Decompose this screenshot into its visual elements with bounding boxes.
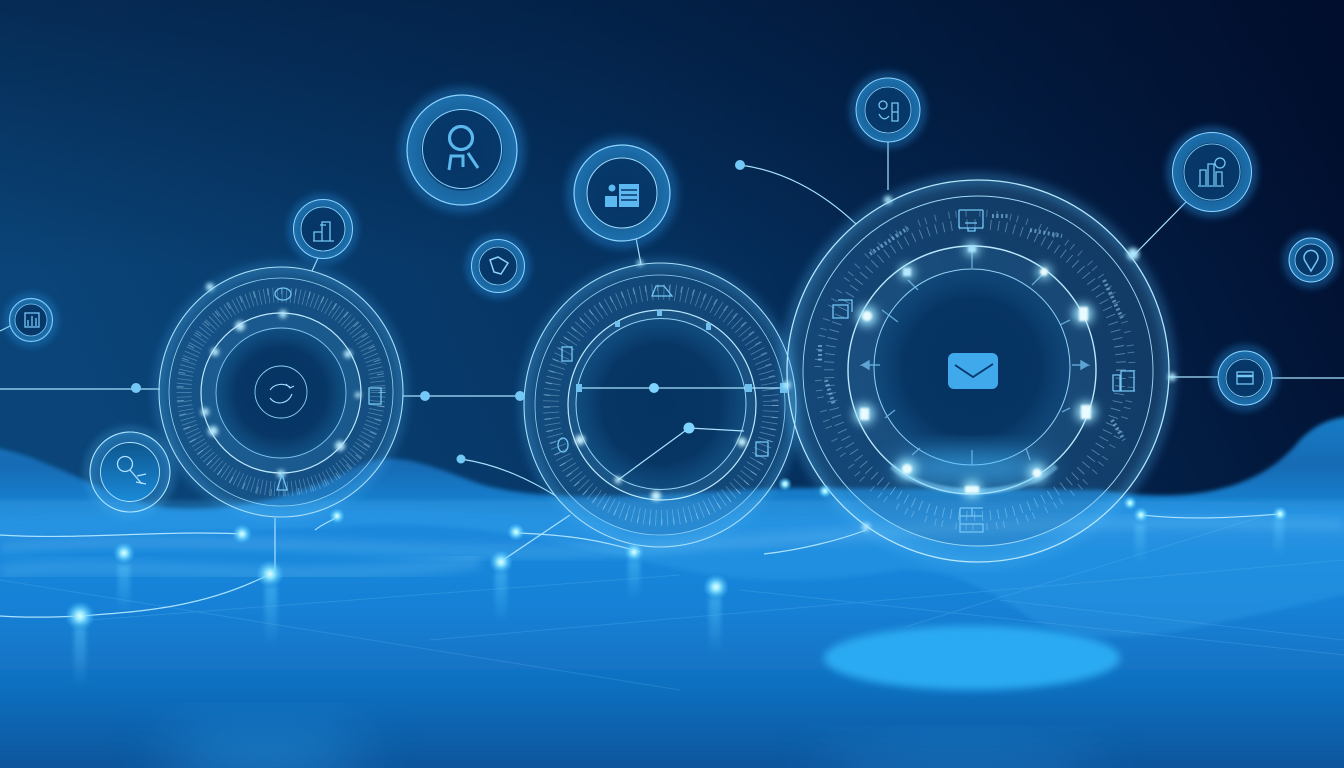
icon: symbols	[879, 101, 898, 121]
connector nodes	[65, 160, 1288, 631]
icon: person and table	[605, 184, 639, 207]
small ring: card	[1216, 349, 1274, 407]
icon: shield	[490, 257, 508, 274]
small ring: coins	[854, 76, 922, 144]
icon: chart	[1198, 158, 1225, 186]
dial microtext marks	[820, 216, 1124, 440]
bottom glow	[165, 730, 1100, 768]
large dial	[786, 179, 1170, 563]
icon: pin	[1304, 250, 1318, 271]
dial lights	[201, 310, 361, 478]
small ring: bar chart	[1171, 131, 1253, 213]
icon: envelope	[948, 353, 998, 389]
small ring: shield	[470, 238, 526, 294]
dial markers	[576, 310, 787, 393]
middle dial	[524, 263, 796, 547]
icon: refresh arrows	[270, 384, 294, 403]
dial lights	[575, 435, 746, 501]
edge lights on rings	[206, 196, 1176, 531]
floor with waves	[0, 414, 1344, 768]
dial icons	[833, 210, 1135, 532]
dial icons	[275, 288, 381, 490]
connector lines	[0, 142, 1344, 617]
reflection streaks under nodes	[74, 520, 1284, 688]
spotlight ellipse	[824, 626, 1120, 690]
small ring: building	[292, 198, 354, 260]
small ring: location pin	[1287, 236, 1335, 284]
icon: building	[313, 222, 334, 241]
icon: small chart	[25, 313, 39, 327]
arrows	[862, 250, 1088, 465]
small ring: document person	[572, 143, 672, 243]
icon: person badge	[449, 126, 478, 170]
icon: card	[1237, 372, 1253, 384]
dial icons	[558, 286, 768, 456]
crosshair and chart line	[576, 388, 785, 480]
small ring: award badge	[405, 93, 519, 207]
glowing nodes	[854, 242, 1096, 498]
left dial	[159, 267, 403, 517]
small ring: magnifier	[88, 430, 172, 514]
small ring: chart left	[8, 297, 54, 343]
icon: magnifier	[118, 456, 146, 484]
